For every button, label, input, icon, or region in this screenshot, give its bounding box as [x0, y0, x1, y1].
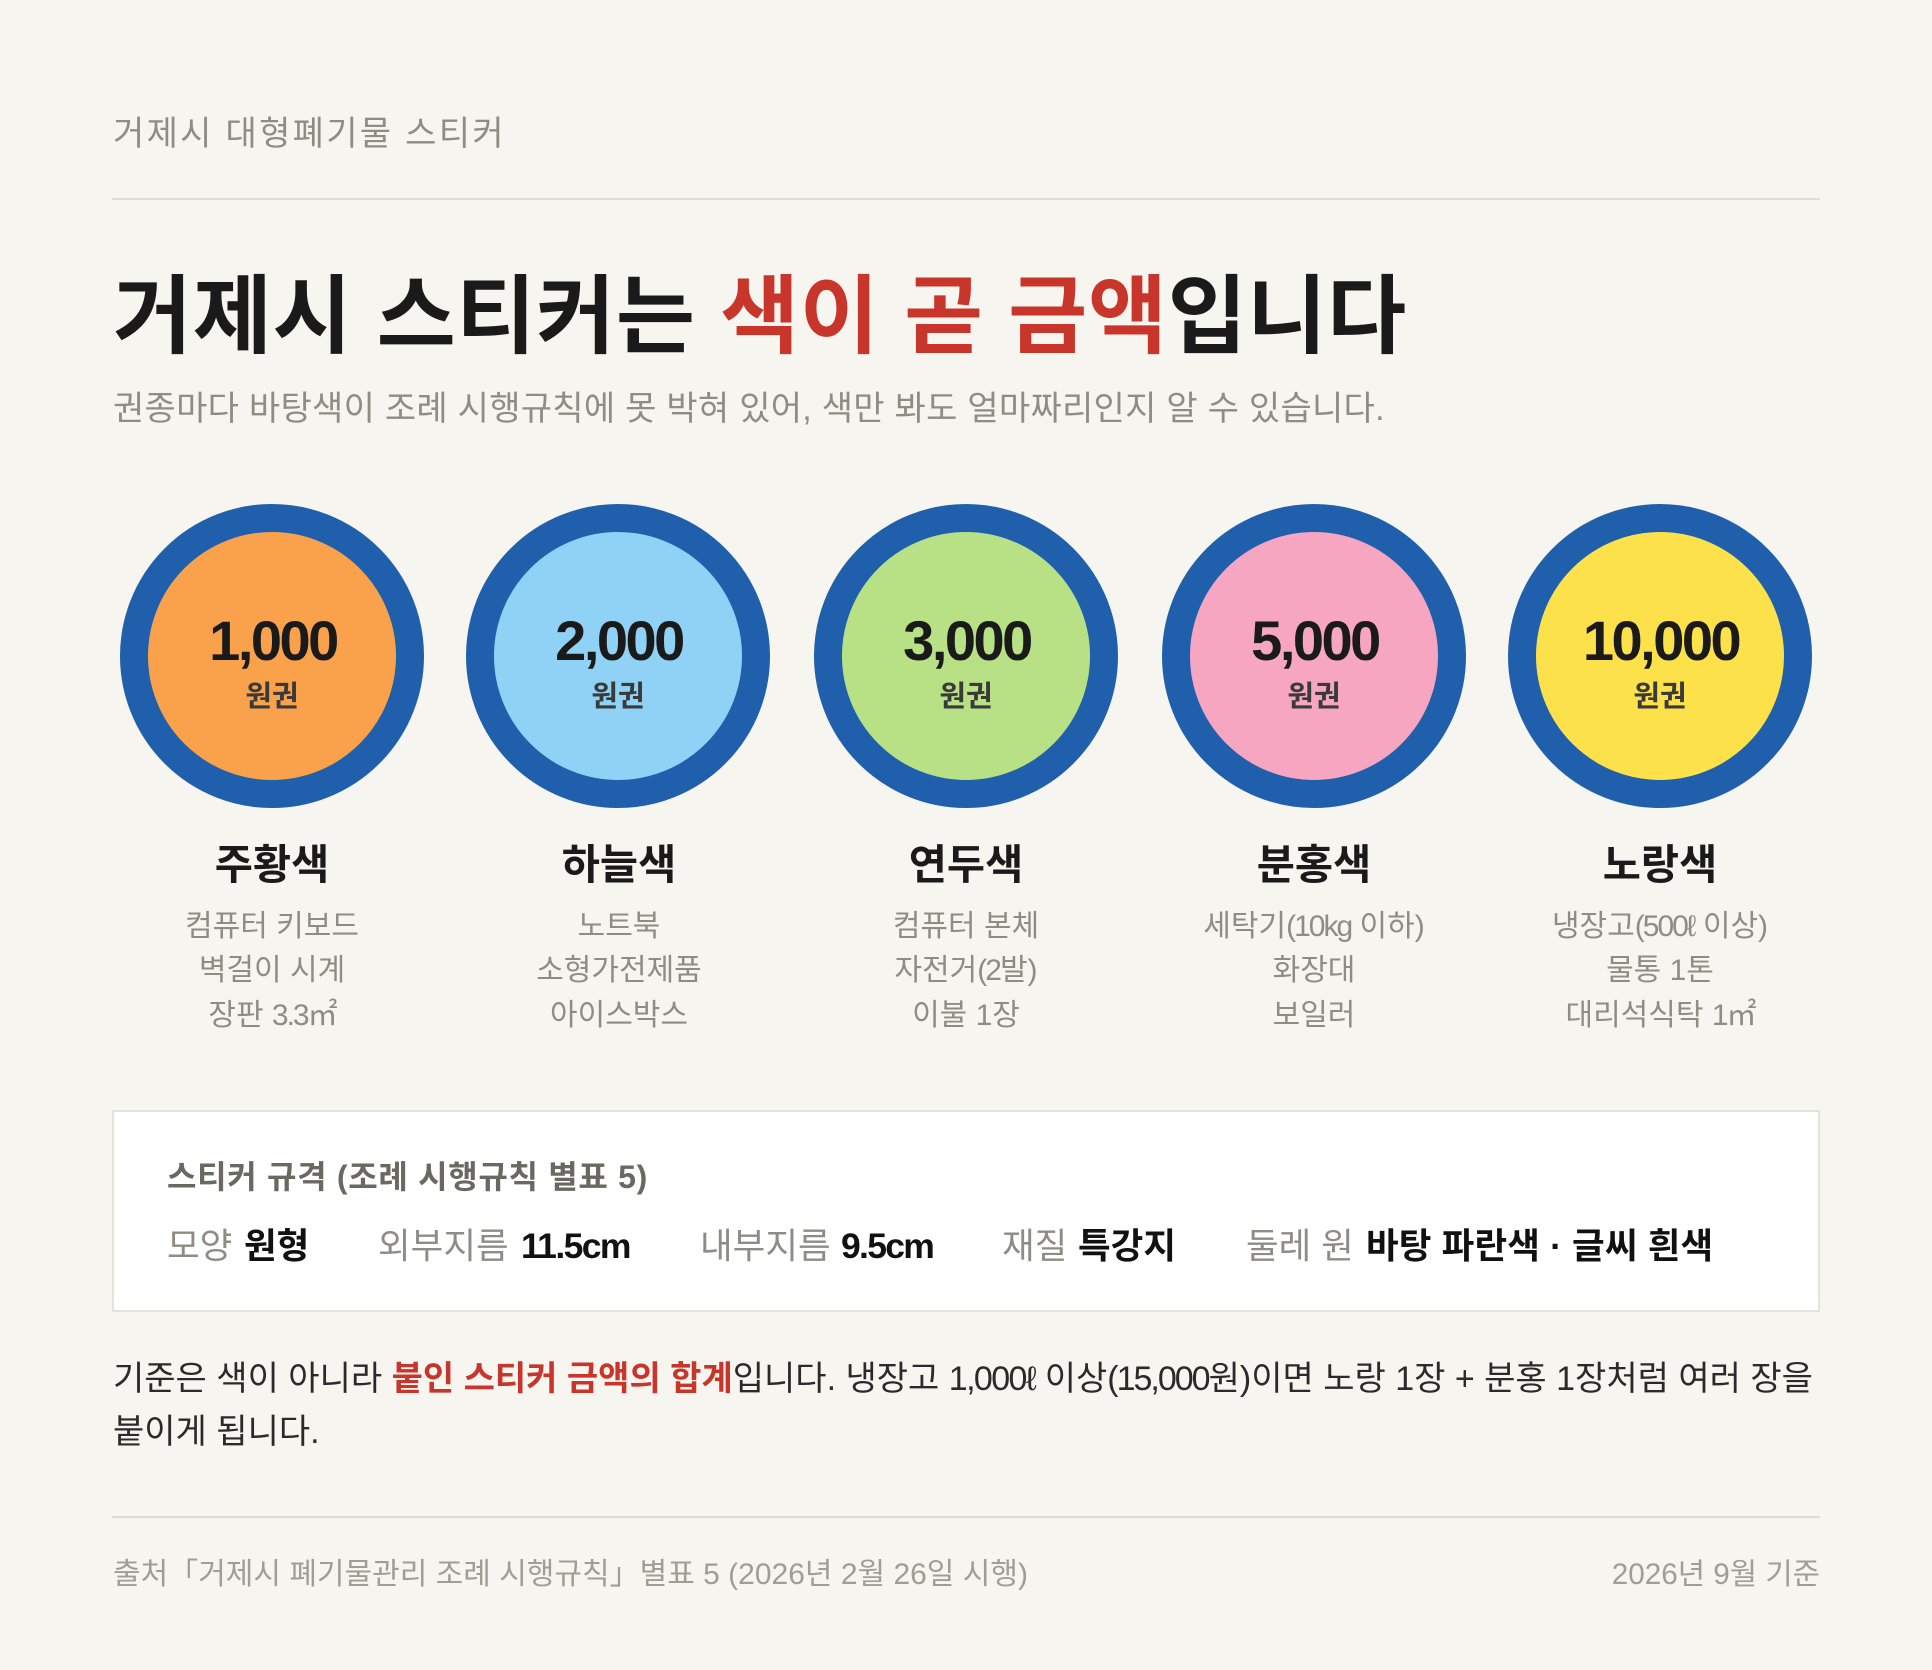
- item list: pink: 세탁기(10kg 이하): [1203, 910, 1425, 943]
- value: 5,000: 5,000: [1251, 609, 1379, 672]
- panel: sticker specification: [112, 1110, 1820, 1312]
- colour name: pink: 분홍색: [1257, 841, 1371, 888]
- spec row: 바탕 파란색 · 글씨 흰색: [1366, 1226, 1713, 1266]
- spec row: [167, 1226, 1713, 1266]
- subtitle: 권종마다 바탕색이 조례 시행규칙에 못 박혀 있어, 색만 봐도 얼마짜리인지 알 수 있습니다.: [113, 390, 1385, 428]
- item list: light green: 컴퓨터 본체: [893, 910, 1039, 943]
- panel: 5,000 won sticker: [1162, 504, 1466, 1032]
- item list: light green: 자전거(2발): [894, 954, 1038, 987]
- explanatory note: [113, 1360, 1813, 1451]
- spec row: 특강지: [1078, 1226, 1176, 1266]
- item list: yellow: 냉장고(500ℓ 이상): [1552, 910, 1768, 943]
- explanatory note: 붙이게 됩니다.: [113, 1413, 320, 1451]
- icon: sky blue sticker circle: [466, 504, 770, 808]
- item list: orange: 벽걸이 시계: [199, 954, 345, 987]
- icon: orange sticker circle: [120, 504, 424, 808]
- item list: yellow: 물통 1톤: [1606, 954, 1714, 987]
- unit: won: 원권: [245, 681, 299, 713]
- item list: sky blue: 소형가전제품: [536, 954, 702, 987]
- item list: sky blue: [536, 910, 702, 1032]
- unit: won: 원권: [1287, 681, 1341, 713]
- date footnote: 2026년 9월 기준: [1612, 1558, 1820, 1591]
- item list: yellow: 대리석식탁 1㎡: [1565, 999, 1755, 1032]
- item list: pink: 화장대: [1273, 954, 1355, 987]
- spec: inner diameter: 내부지름: [700, 1226, 831, 1266]
- explanatory note: 기준은 색이 아니라 붙인 스티커 금액의 합계입니다. 냉장고 1,000ℓ 이상(15,000원)이면 노랑 1장 + 분홍 1장처럼 여러 장을: [113, 1360, 1813, 1398]
- icon: light green sticker circle: [814, 504, 1118, 808]
- item list: light green: 이불 1장: [912, 999, 1020, 1032]
- item list: yellow: [1552, 910, 1768, 1032]
- item list: orange: 컴퓨터 키보드: [185, 910, 359, 943]
- item list: light green: [893, 910, 1039, 1032]
- spec: outer diameter: 외부지름: [378, 1226, 509, 1266]
- icon: yellow sticker circle: [1508, 504, 1812, 808]
- item list: pink: 보일러: [1273, 999, 1355, 1032]
- item list: sky blue: 아이스박스: [550, 999, 688, 1032]
- panel: 2,000 won sticker: [466, 504, 770, 1032]
- spec row: 원형: [244, 1226, 309, 1266]
- item list: sky blue: 노트북: [578, 910, 660, 943]
- colour name: yellow: 노랑색: [1603, 841, 1717, 888]
- spec: outline ring: 둘레 원: [1246, 1226, 1354, 1266]
- item list: orange: 장판 3.3㎡: [208, 999, 336, 1032]
- spec row: 9.5cm: [841, 1226, 933, 1266]
- spec: material: 재질: [1002, 1226, 1067, 1266]
- colour name: light green: 연두색: [909, 841, 1023, 888]
- colour name: orange: 주황색: [215, 841, 329, 888]
- unit: won: 원권: [939, 681, 993, 713]
- spec: shape: 모양: [167, 1226, 232, 1266]
- source footnote: 출처「거제시 폐기물관리 조례 시행규칙」별표 5 (2026년 2월 26일 시행): [113, 1558, 1028, 1591]
- panel: 3,000 won sticker: [814, 504, 1118, 1032]
- value: 2,000: 2,000: [555, 609, 683, 672]
- panel: 10,000 won sticker: [1508, 504, 1812, 1032]
- unit: won: 원권: [1633, 681, 1687, 713]
- spec heading: 스티커 규격 (조례 시행규칙 별표 5): [167, 1159, 648, 1195]
- eyebrow label: 거제시 대형폐기물 스티커: [113, 115, 506, 153]
- item list: orange: [185, 910, 359, 1032]
- value: 3,000: 3,000: [903, 609, 1031, 672]
- unit: won: 원권: [591, 681, 645, 713]
- value: 10,000: 10,000: [1583, 609, 1739, 672]
- spec row: 11.5cm: [521, 1226, 630, 1266]
- value: 1,000: 1,000: [209, 609, 337, 672]
- icon: pink sticker circle: [1162, 504, 1466, 808]
- colour name: sky blue: 하늘색: [562, 841, 676, 888]
- item list: pink: [1203, 910, 1425, 1032]
- panel: 1,000 won sticker: [120, 504, 424, 1032]
- title: 거제시 스티커는 색이 곧 금액입니다: [113, 269, 1407, 365]
